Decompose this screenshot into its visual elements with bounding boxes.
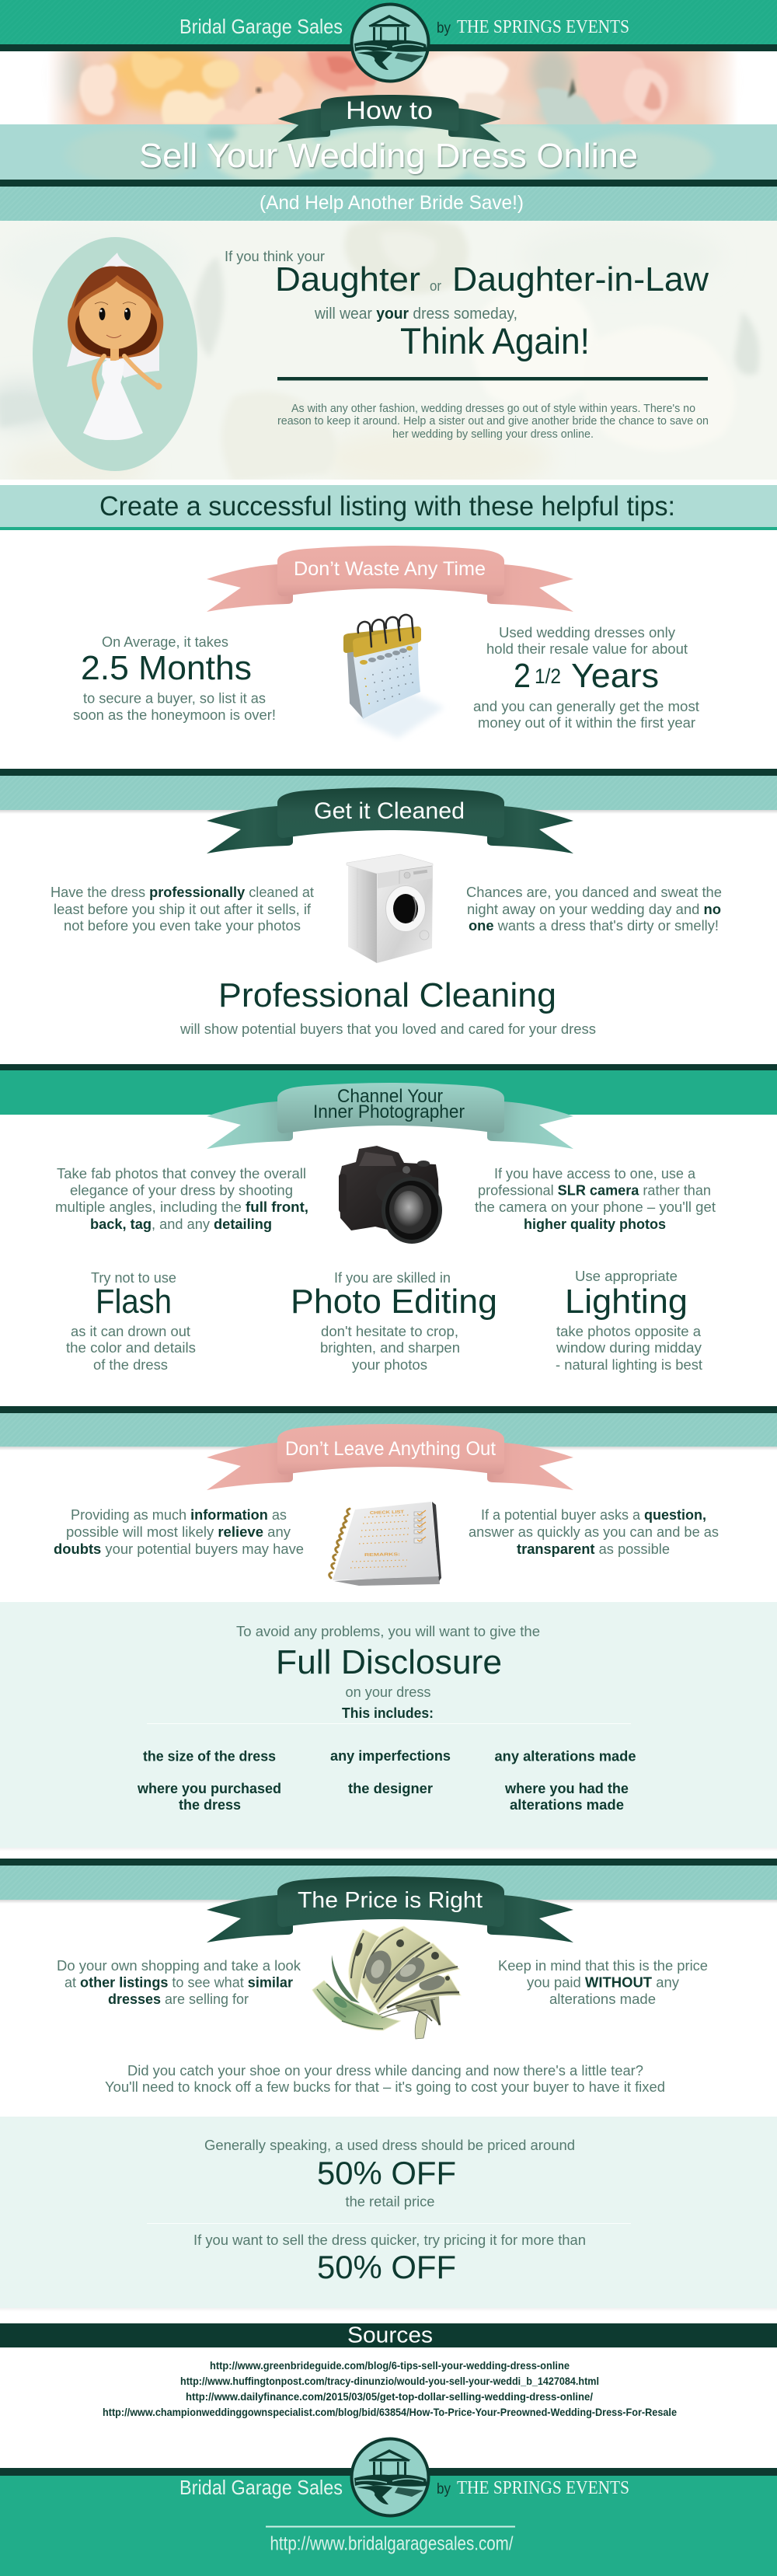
how to ribbon <box>278 95 501 142</box>
text: fab photos: elegance of your dress by shooting <box>70 1183 293 1199</box>
icon: checklist notebook: CHECK LIST <box>370 1510 405 1516</box>
logo: gazebo <box>351 5 429 81</box>
text: keep in mind <box>498 1958 708 2007</box>
sources list: http://www.championweddinggownspecialist.com/blog/bid/63854/How-To-Price-Your-Preowned-Wedding-Dress-For-Resale <box>103 2406 677 2418</box>
tips heading band: Create a successful listing with these helpful tips: <box>99 491 675 522</box>
disclosure heading: Full Disclosure <box>276 1643 502 1681</box>
section band: cleaned <box>0 769 777 814</box>
text: tear on dress: You'll need to knock off a few bucks for that – it's going to cost your buyer to have it fixed <box>105 2079 665 2095</box>
footer band: Bridal Garage Sales <box>179 2476 343 2499</box>
icon: calendar <box>343 615 444 738</box>
faded flower background <box>0 218 777 490</box>
text: dirty dress: Chances are, you danced and sweat the <box>466 885 722 900</box>
intro text: Daughter-in-Law <box>452 260 709 298</box>
professional cleaning callout <box>179 976 596 1037</box>
tip: flash <box>66 1270 196 1373</box>
text: do your shopping: Do your own shopping and take a look <box>57 1958 301 1974</box>
icon: checklist notebook: REMARKS: <box>364 1552 400 1558</box>
tip: flash: Flash <box>96 1283 172 1321</box>
stat: 2 1/2 years: 1/2 <box>535 665 561 688</box>
text: clean the dress <box>51 885 314 934</box>
panel: pricing <box>0 2117 777 2312</box>
stat: 2.5 months: soon as the honeymoon is over! <box>73 707 276 723</box>
intro text: will wear your dress someday, <box>314 305 517 323</box>
icon: checklist notebook <box>329 1502 441 1586</box>
subtitle band <box>0 180 777 225</box>
sources list: http://www.huffingtonpost.com/tracy-dinunzio/would-you-sell-your-weddi_b_1427084.html <box>180 2375 599 2387</box>
tip: lighting: Use appropriate <box>575 1269 678 1284</box>
stat: 2 1/2 years <box>473 625 699 731</box>
intro paragraph: reason to keep it around. Help a sister out and give another bride the chance to save on <box>277 415 709 428</box>
ribbon: don't waste any time: Don’t Waste Any Time <box>294 558 486 580</box>
tip: photo editing: your photos <box>352 1357 427 1373</box>
disclosure intro: To avoid any problems, you will want to give the <box>236 1624 540 1639</box>
stat: 2.5 months <box>73 634 276 723</box>
stat: 2 1/2 years: 2 <box>514 657 531 695</box>
footer band: http://www.bridalgaragesales.com/ <box>270 2532 514 2554</box>
top header band: THE SPRINGS EVENTS <box>457 17 629 37</box>
intro paragraph: her wedding by selling your dress online. <box>392 428 594 441</box>
stat: 2 1/2 years: Years <box>571 657 659 695</box>
sources heading <box>0 2323 777 2347</box>
text: question: transparent as possible <box>517 1541 670 1557</box>
ribbon: the price is right: The Price is Right <box>298 1888 483 1913</box>
pricing line one: Generally speaking, a used dress should be priced around <box>204 2138 575 2153</box>
subtitle band: (And Help Another Bride Save!) <box>260 192 524 214</box>
list of items: where you had the <box>504 1781 629 1796</box>
intro text: Think Again! <box>400 320 590 361</box>
text: tear on dress <box>105 2063 665 2095</box>
ribbon: the price is right <box>207 1876 573 1942</box>
section band: leave anything out <box>0 1406 777 1450</box>
stat: 2 1/2 years: money out of it within the first year <box>478 715 695 731</box>
list of items: the designer <box>348 1781 433 1796</box>
intro text <box>225 249 709 361</box>
text: information: doubts your potential buyers may have <box>54 1541 304 1557</box>
tip: lighting <box>556 1269 702 1373</box>
disclosure sub text: on your dress <box>345 1684 430 1700</box>
text: do your shopping: dresses are selling for <box>108 1991 249 2007</box>
stat: 2 1/2 years: hold their resale value for about <box>486 641 688 657</box>
text: clean the dress: least before you ship it out after it sells, if <box>54 902 312 917</box>
text: dirty dress: night away on your wedding day and no <box>467 902 721 917</box>
tip: photo editing: brighten, and sharpen <box>320 1340 460 1356</box>
text: tear on dress: Did you catch your shoe on your dress while dancing and now there's a little tear? <box>127 2063 643 2079</box>
text: SLR camera: professional SLR camera rather than <box>478 1183 711 1199</box>
sources heading: Sources <box>347 2323 433 2347</box>
text: fab photos: multiple angles, including the full front, <box>55 1199 308 1215</box>
stat: 2 1/2 years: and you can generally get the most <box>473 699 699 714</box>
tips heading band <box>0 485 777 530</box>
list of items: where you purchased <box>137 1781 281 1796</box>
tip: flash: Try not to use <box>91 1270 176 1286</box>
text: fab photos: back, tag, and any detailing <box>90 1216 272 1232</box>
ribbon: channel your inner photographer <box>207 1083 573 1149</box>
ribbon: don't waste any time <box>207 546 573 612</box>
section band: price <box>0 1859 777 1904</box>
sources list <box>103 2359 677 2418</box>
ribbon: don't leave anything out <box>207 1424 573 1490</box>
intro text: or <box>430 278 441 294</box>
list of items: alterations made <box>510 1797 624 1813</box>
text: information: Providing as much information as <box>71 1507 287 1523</box>
text: clean the dress: not before you even take your photos <box>64 918 301 934</box>
tip: lighting: window during midday <box>556 1340 702 1356</box>
top header band: by <box>437 20 451 37</box>
text: question <box>469 1507 719 1557</box>
this includes: This includes: <box>342 1705 434 1721</box>
text: information <box>54 1507 304 1557</box>
ribbon: don't leave anything out: Don’t Leave Anything Out <box>285 1438 496 1460</box>
icon: money fan <box>312 1926 461 2039</box>
top header band <box>0 0 777 51</box>
sources list: http://www.greenbrideguide.com/blog/6-tips-sell-your-wedding-dress-online <box>210 2359 570 2372</box>
intro divider <box>277 377 708 381</box>
50% off stat: 50% OFF <box>317 2155 456 2191</box>
text: fab photos: Take fab photos that convey the overall <box>57 1166 306 1182</box>
intro text: If you think your <box>225 249 325 264</box>
intro text: Daughter <box>275 260 420 298</box>
text: question: answer as quickly as you can and be as <box>469 1524 719 1540</box>
ribbon: channel your inner photographer: Inner Photographer <box>313 1101 465 1122</box>
panel: full disclosure <box>0 1602 777 1852</box>
list of items: the dress <box>179 1797 241 1813</box>
section band: photographer <box>0 1064 777 1115</box>
second 50% off stat: 50% OFF <box>317 2249 456 2285</box>
tip: photo editing: don't hesitate to crop, <box>321 1324 458 1339</box>
list of items <box>137 1748 636 1813</box>
text: SLR camera <box>475 1166 716 1232</box>
stat: 2 1/2 years: Used wedding dresses only <box>499 625 675 641</box>
text: SLR camera: higher quality photos <box>524 1216 666 1232</box>
footer logo <box>351 2439 429 2515</box>
footer band <box>0 2468 777 2576</box>
ribbon: get it cleaned: Get it Cleaned <box>314 798 465 824</box>
text: do your shopping <box>57 1958 301 2007</box>
text: clean the dress: Have the dress professionally cleaned at <box>51 885 314 900</box>
text: question: If a potential buyer asks a question, <box>481 1507 706 1523</box>
tip: photo editing: If you are skilled in <box>334 1270 451 1286</box>
how to ribbon: How to <box>346 96 433 124</box>
intro paragraph: As with any other fashion, wedding dresses go out of style within years. There's no <box>291 403 695 415</box>
text: keep in mind: you paid WITHOUT any <box>527 1974 679 1990</box>
text: SLR camera: the camera on your phone – you'll get <box>475 1199 716 1215</box>
tip: lighting: - natural lighting is best <box>556 1357 702 1373</box>
stat: 2.5 months: 2.5 Months <box>81 649 252 687</box>
tip: flash: of the dress <box>93 1357 168 1373</box>
footer band: by <box>437 2481 451 2497</box>
text: dirty dress <box>466 885 722 934</box>
tip: lighting: Lighting <box>565 1283 688 1321</box>
stat: 2.5 months: to secure a buyer, so list it as <box>83 690 266 706</box>
text: dirty dress: one wants a dress that's dirty or smelly! <box>469 918 719 934</box>
text: fab photos <box>55 1166 308 1232</box>
list of items: any imperfections <box>330 1748 451 1764</box>
top header band: Bridal Garage Sales <box>179 15 343 38</box>
professional cleaning callout: will show potential buyers that you loved and cared for your dress <box>179 1021 596 1037</box>
sources list: http://www.dailyfinance.com/2015/03/05/get-top-dollar-selling-wedding-dress-online/ <box>186 2390 593 2403</box>
intro paragraph <box>277 403 709 441</box>
icon: camera <box>339 1146 442 1244</box>
footer band: THE SPRINGS EVENTS <box>457 2478 629 2498</box>
tip: lighting: take photos opposite a <box>556 1324 702 1339</box>
text: keep in mind: Keep in mind that this is the price <box>498 1958 708 1974</box>
bride illustration <box>33 237 197 471</box>
list of items: the size of the dress <box>143 1749 276 1764</box>
tip: photo editing: Photo Editing <box>291 1283 497 1321</box>
tip: photo editing <box>291 1270 497 1373</box>
ribbon: get it cleaned <box>207 787 573 853</box>
text: information: possible will most likely relieve any <box>66 1524 291 1540</box>
text: keep in mind: alterations made <box>549 1991 656 2007</box>
ribbon: channel your inner photographer: Channel Your <box>337 1086 443 1107</box>
text: do your shopping: at other listings to see what similar <box>64 1974 293 1990</box>
icon: washing machine <box>347 854 433 963</box>
hero flower photo band <box>0 51 777 180</box>
stat: 2.5 months: On Average, it takes <box>102 634 228 650</box>
retail price label: the retail price <box>345 2194 435 2209</box>
main title: Sell Your Wedding Dress Online <box>139 137 638 175</box>
tip: flash: the color and details <box>66 1340 196 1356</box>
pricing line two: If you want to sell the dress quicker, try pricing it for more than <box>193 2232 586 2248</box>
list of items: any alterations made <box>494 1749 636 1764</box>
tip: flash: as it can drown out <box>71 1324 190 1339</box>
text: SLR camera: If you have access to one, use a <box>494 1166 696 1182</box>
professional cleaning callout: Professional Cleaning <box>218 976 556 1014</box>
